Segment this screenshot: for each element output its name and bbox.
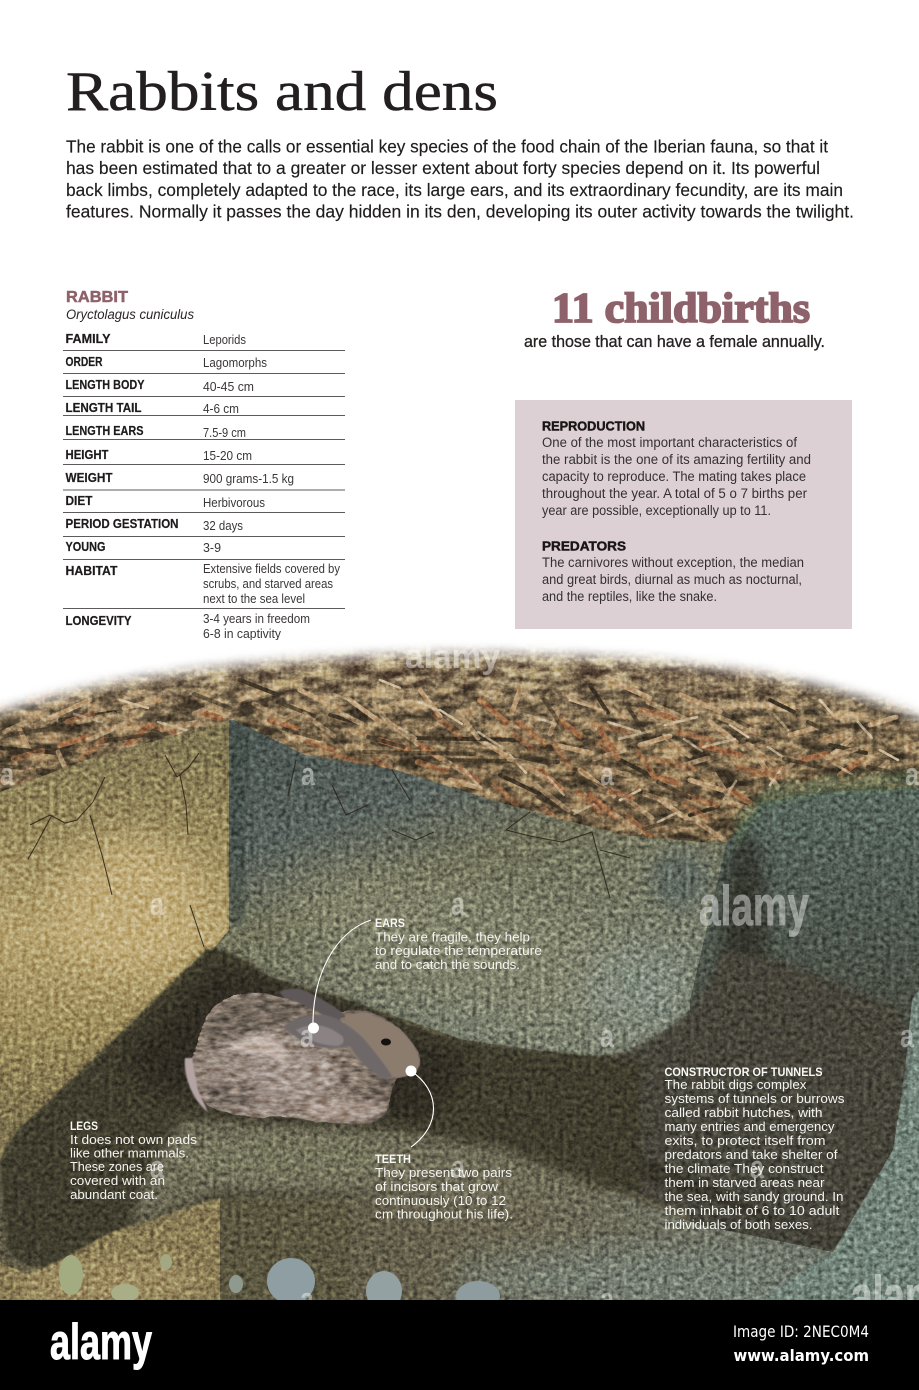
- table rows: [63, 332, 345, 641]
- table rows: FAMILY: [66, 332, 111, 346]
- table rows: WEIGHT: [66, 471, 113, 485]
- callout: constructor of tunnels: them in starved areas near: [664, 1175, 825, 1190]
- ground surface: leaf litter: [0, 640, 919, 845]
- rabbit back shading: [205, 998, 316, 1048]
- rabbit eye: [381, 1038, 391, 1046]
- predators text: The carnivores without exception, the median: [542, 555, 804, 570]
- watermarks: a: [451, 886, 465, 922]
- top watermark: alamy: [405, 638, 500, 676]
- callout: constructor of tunnels: them inhabit of 6 to 10 adult: [664, 1203, 840, 1218]
- callout: teeth: cm throughout his life).: [375, 1206, 513, 1222]
- watermarks: a: [451, 1149, 465, 1185]
- callout: constructor of tunnels: the climate They construct: [664, 1161, 824, 1176]
- callout: teeth: [375, 1066, 513, 1222]
- callout: ears: and to catch the sounds.: [375, 957, 520, 972]
- rabbit back ear: [279, 988, 345, 1022]
- den cavity: [0, 948, 640, 1268]
- callout: ears: to regulate the temperature: [375, 943, 542, 958]
- table rows: DIET: [66, 494, 93, 508]
- watermarks: a: [150, 1149, 164, 1185]
- table rows: ORDER: [66, 355, 102, 369]
- tunnel ledge shadow: [640, 1157, 817, 1236]
- table rows: 3-9: [203, 541, 221, 555]
- watermarks: alamy: [699, 874, 809, 937]
- table rows: Lagomorphs: [203, 356, 267, 370]
- callout: legs: [70, 1119, 198, 1202]
- callout: constructor of tunnels: many entries and emergency: [664, 1119, 835, 1134]
- callout: teeth: They present two pairs: [375, 1165, 513, 1180]
- table rows: Herbivorous: [203, 496, 265, 510]
- table rows: LENGTH TAIL: [66, 401, 142, 415]
- intro text block: [66, 136, 854, 222]
- leader line and dot: [308, 920, 371, 1034]
- table rows: 4-6 cm: [203, 402, 239, 416]
- table rows: Extensive fields covered by: [203, 562, 341, 576]
- table rows: scrubs, and starved areas: [203, 577, 333, 591]
- rabbit haunch highlight: [225, 1035, 286, 1064]
- table rows: YOUNG: [66, 540, 106, 554]
- website: www.alamy.com: [734, 1346, 869, 1365]
- callout: ears: EARS: [375, 916, 405, 930]
- table rows: 7.5-9 cm: [203, 426, 246, 440]
- predators text: and the reptiles, like the snake.: [542, 589, 717, 604]
- right passage wall: [690, 770, 919, 1300]
- intro text block: has been estimated that to a greater or lesser extent about forty species depend on it. Its powerful: [66, 158, 820, 178]
- callout: legs: covered with an: [70, 1173, 165, 1188]
- reproduction text: year are possible, exceptionally up to 11.: [542, 503, 771, 518]
- table rows: LENGTH BODY: [66, 378, 145, 392]
- table heading: RABBIT: [66, 289, 128, 306]
- rabbit body: [189, 993, 420, 1124]
- reproduction text: throughout the year. A total of 5 o 7 births per: [542, 486, 807, 501]
- intro text block: features. Normally it passes the day hidden in its den, developing its outer activity towards the twilight.: [66, 202, 854, 222]
- callout: constructor of tunnels: CONSTRUCTOR OF TUNNELS: [664, 1065, 822, 1079]
- reproduction text: REPRODUCTION: [542, 418, 645, 434]
- callout: teeth: continuously (10 to 12: [375, 1193, 506, 1208]
- callout: constructor of tunnels: systems of tunnels or burrows: [664, 1091, 845, 1106]
- callout: legs: like other mammals.: [70, 1146, 189, 1160]
- title: Rabbits and dens: [66, 61, 498, 123]
- watermarks: a: [150, 886, 164, 922]
- callout: legs: abundant coat.: [70, 1187, 158, 1202]
- table rows: 900 grams-1.5 kg: [203, 472, 294, 486]
- stones: [59, 1254, 500, 1300]
- reproduction text: One of the most important characteristics of: [542, 435, 797, 450]
- callout: ears: They are fragile, they help: [375, 930, 530, 944]
- leader line and dot: [406, 1066, 434, 1147]
- watermarks: a: [900, 1018, 914, 1054]
- table rows: HABITAT: [66, 564, 118, 578]
- table rows: HEIGHT: [66, 448, 109, 462]
- watermarks: a: [600, 1281, 614, 1317]
- alamy logo: alamy: [50, 1314, 152, 1370]
- image id: Image ID: 2NEC0M4: [733, 1322, 869, 1341]
- table rows: LONGEVITY: [66, 614, 132, 628]
- rabbit flank shadow: [198, 1081, 258, 1109]
- reproduction text: [542, 418, 811, 518]
- lower floor: [0, 990, 919, 1308]
- table rows: 3-4 years in freedom: [203, 612, 310, 626]
- panel: rabbit data table: [63, 289, 345, 641]
- table rows: 6-8 in captivity: [203, 627, 282, 641]
- table rows: next to the sea level: [203, 592, 305, 606]
- scientific name: Oryctolagus cuniculus: [66, 307, 194, 322]
- watermarks: a: [300, 1281, 314, 1317]
- white fade above ground: [0, 640, 919, 728]
- intro text block: The rabbit is one of the calls or essential key species of the food chain of the Iberian fauna, so that it: [66, 136, 828, 156]
- watermarks: a: [300, 1018, 314, 1054]
- callout: constructor of tunnels: The rabbit digs complex: [664, 1077, 807, 1092]
- cracks: [28, 753, 630, 947]
- table rows: LENGTH EARS: [66, 424, 144, 438]
- watermarks: a: [750, 1149, 764, 1185]
- table rows: 15-20 cm: [203, 449, 252, 463]
- tunnel shadow: [500, 950, 905, 1243]
- callout: constructor of tunnels: called rabbit hutches, with: [664, 1105, 822, 1120]
- soil grain texture: [0, 640, 919, 1300]
- watermarks: a: [600, 1018, 614, 1054]
- big stat: childbirths: are those that can have a female annually.: [524, 333, 825, 351]
- watermarks: a: [0, 756, 14, 792]
- intro text block: back limbs, completely adapted to the race, its large ears, and its extraordinary fecundity, are its main: [66, 180, 843, 200]
- rabbit chest highlight: [273, 1056, 337, 1096]
- watermarks: a: [600, 756, 614, 792]
- rabbit tail: [185, 1058, 208, 1112]
- predators text: PREDATORS: [542, 538, 626, 554]
- illustration: burrow cross-section: [0, 640, 919, 1300]
- left wall: tan soil: [0, 720, 229, 1160]
- callout: teeth: of incisors that grow: [375, 1179, 499, 1194]
- callout: constructor of tunnels: exits, to protect itself from: [664, 1133, 826, 1148]
- callout: legs: LEGS: [70, 1119, 98, 1133]
- back wall: grey-blue soil: [211, 720, 727, 1058]
- panel: reproduction and predators: [515, 400, 852, 629]
- callout: constructor of tunnels: [664, 1065, 845, 1232]
- callout: legs: These zones are: [70, 1159, 164, 1174]
- table rows: PERIOD GESTATION: [66, 517, 178, 531]
- callout: constructor of tunnels: individuals of both sexes.: [664, 1217, 812, 1232]
- reproduction text: the rabbit is the one of its amazing fertility and: [542, 452, 811, 467]
- big stat: childbirths: [524, 286, 825, 351]
- predators text: and great birds, diurnal as much as nocturnal,: [542, 572, 802, 587]
- callout: constructor of tunnels: predators and take shelter of: [664, 1147, 838, 1162]
- rabbit inner ear: [296, 1025, 344, 1046]
- footer bar: [0, 1300, 919, 1390]
- reproduction text: capacity to reproduce. The mating takes place: [542, 469, 806, 484]
- watermarks: a: [301, 756, 315, 792]
- callout: constructor of tunnels: the sea, with sandy ground. In: [664, 1189, 844, 1204]
- den ledge: [130, 1120, 620, 1225]
- table rows: Leporids: [203, 333, 246, 347]
- callout: ears: [308, 916, 542, 1034]
- callout: legs: It does not own pads: [70, 1132, 198, 1147]
- watermarks: [0, 756, 919, 1342]
- rabbit head: [342, 1013, 420, 1078]
- rabbit: [185, 988, 420, 1124]
- callout: teeth: TEETH: [375, 1152, 411, 1166]
- table rows: 40-45 cm: [203, 380, 254, 394]
- big stat: childbirths: 11 childbirths: [552, 286, 810, 332]
- table rows: 32 days: [203, 519, 243, 533]
- rabbit front ear: [283, 1015, 392, 1079]
- predators text: [542, 538, 804, 604]
